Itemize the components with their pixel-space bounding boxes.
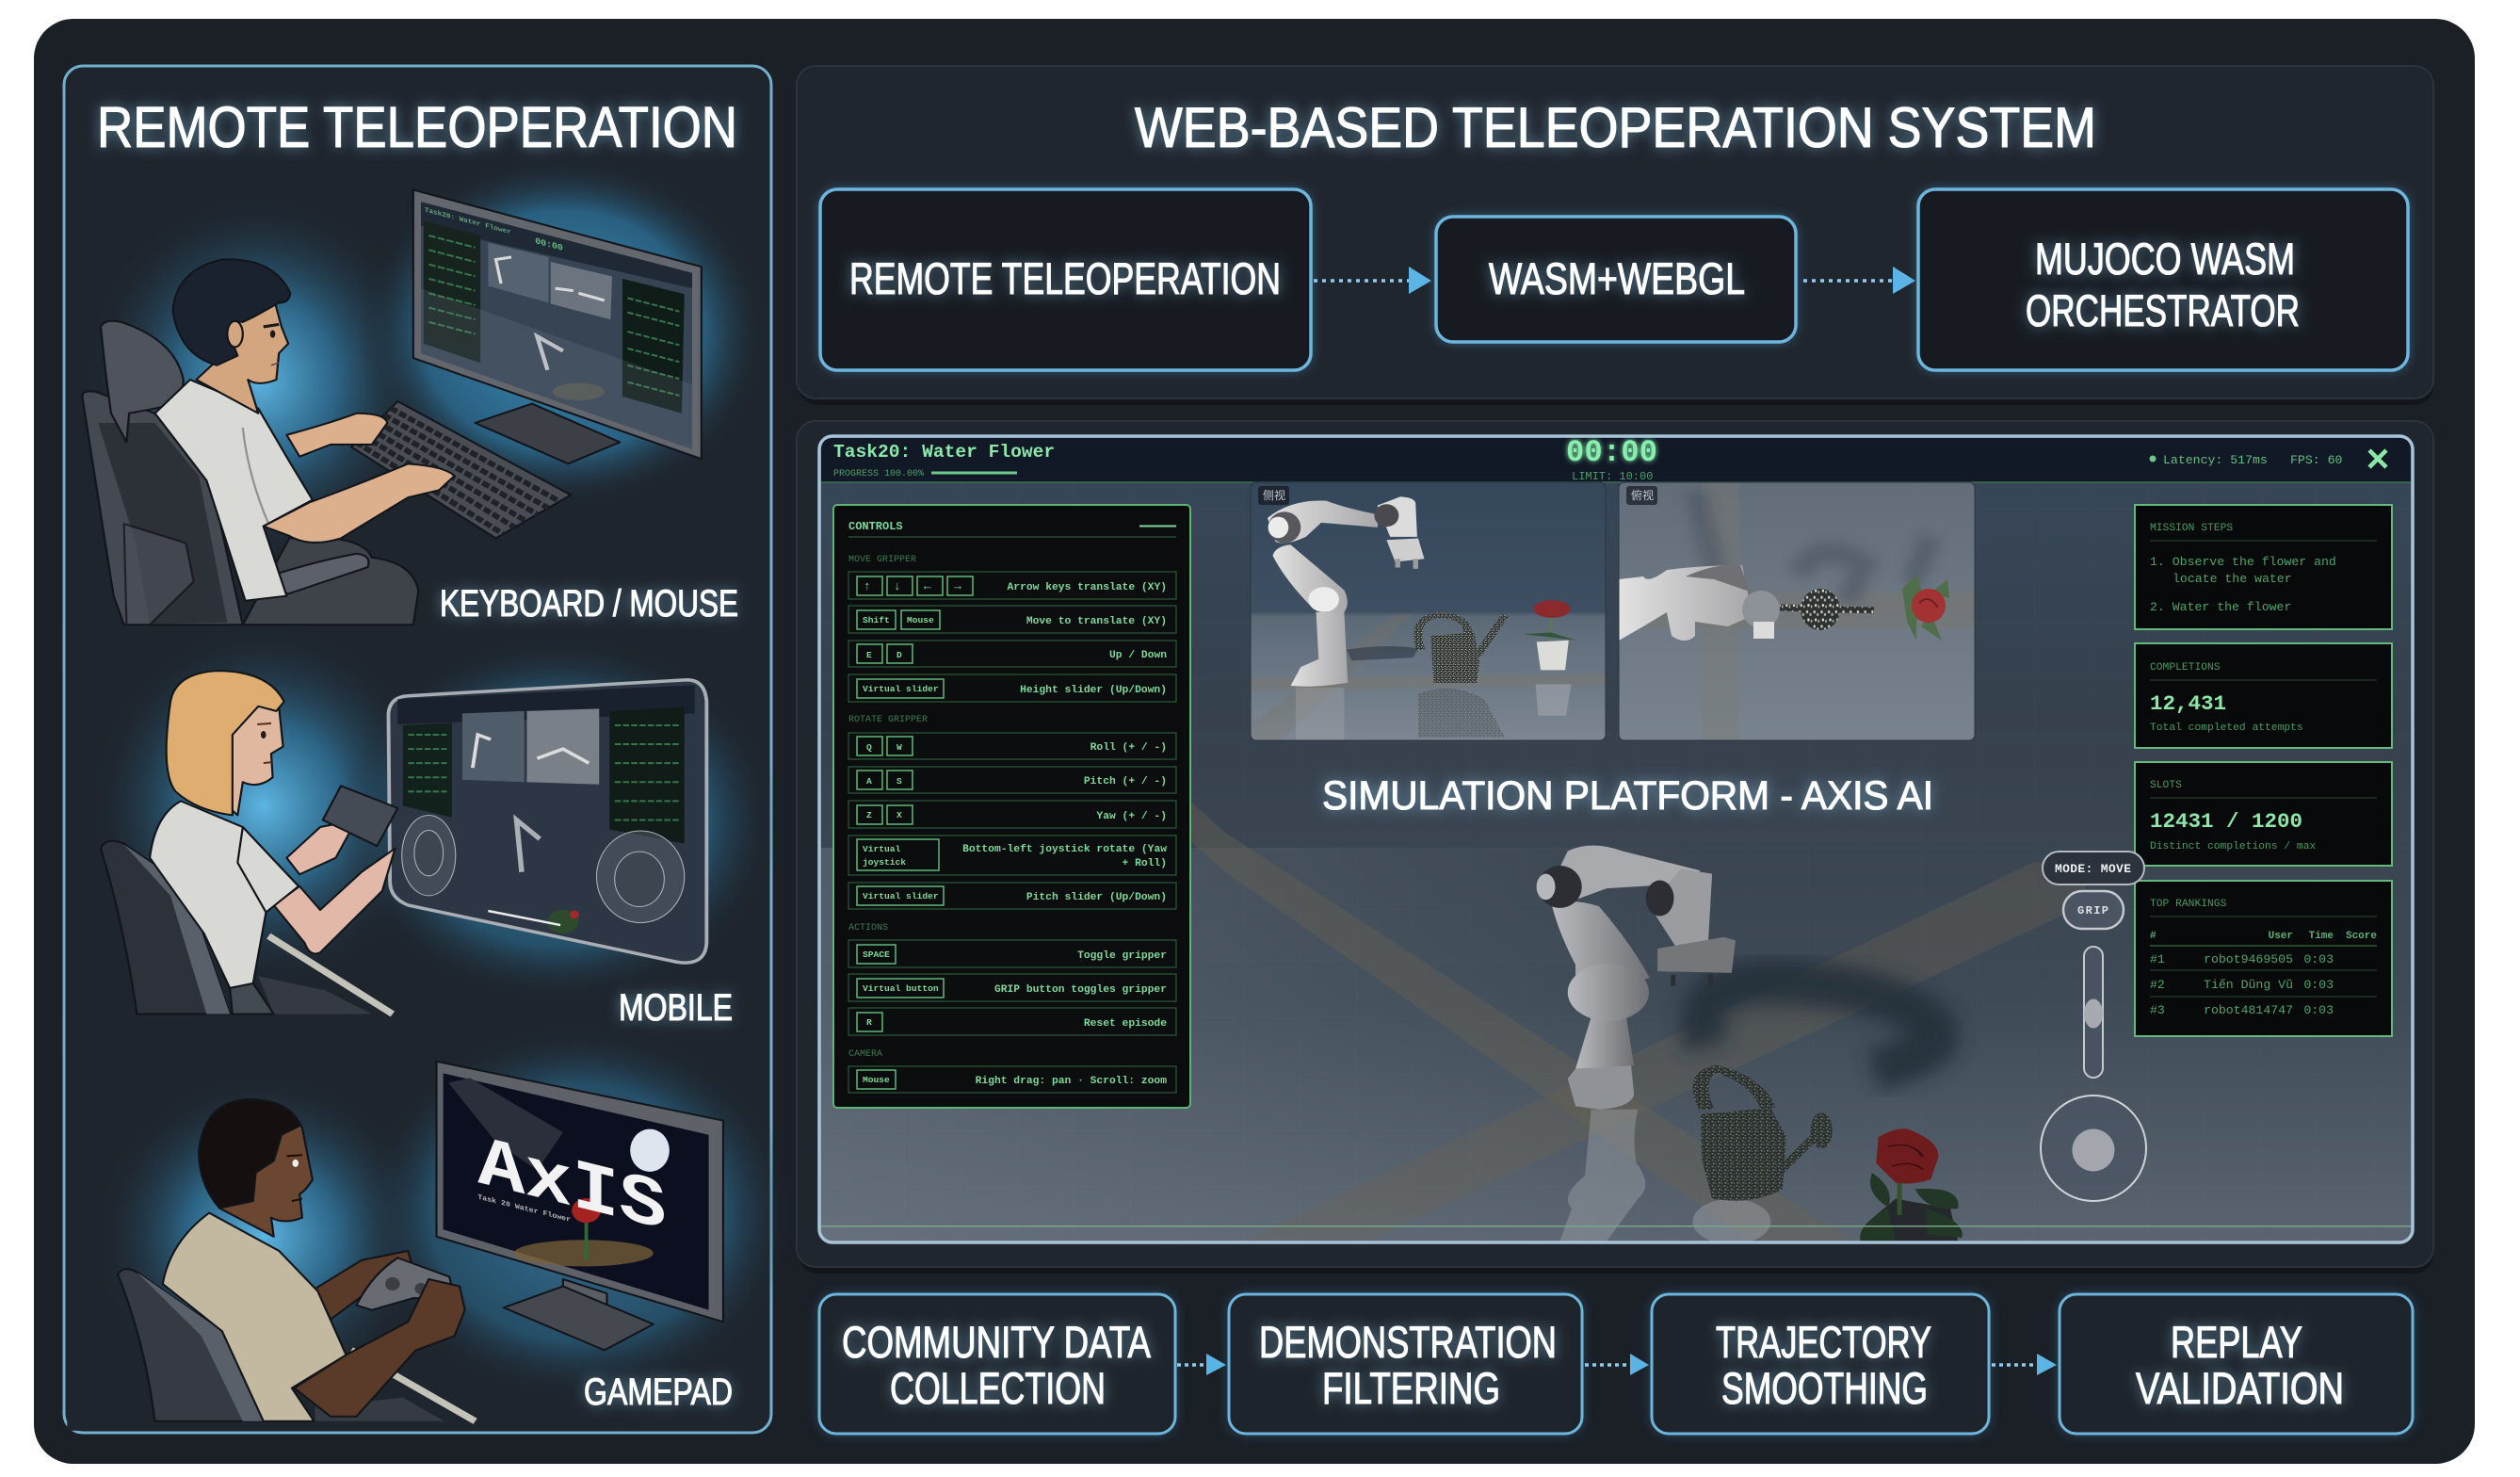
time limit: LIMIT: 10:00 xyxy=(1572,470,1653,483)
row: pitch slider xyxy=(848,883,1176,909)
panel: mission steps: 1. Observe the flower and xyxy=(2150,555,2336,569)
panel: top rankings: #2 xyxy=(2150,978,2165,992)
timer: 00:00 xyxy=(1566,435,1657,470)
row: joystick xyxy=(848,836,1176,875)
panel: completions xyxy=(2135,643,2392,748)
row: pitch slider: Pitch slider (Up/Down) xyxy=(1026,892,1167,903)
node: mujoco wasm orchestrator: MUJOCO WASM xyxy=(2035,234,2295,284)
row: up down xyxy=(848,641,1176,667)
panel: slots: 12431 / 1200 xyxy=(2150,809,2302,834)
panel: mission steps: 2. Water the flower xyxy=(2150,600,2291,614)
panel: controls: CONTROLS xyxy=(848,520,903,533)
pipeline: community data collection: COLLECTION xyxy=(890,1363,1106,1413)
panel: top rankings: 0:03 xyxy=(2303,952,2334,966)
panel: mission steps: MISSION STEPS xyxy=(2150,523,2233,534)
row: reset xyxy=(848,1008,1176,1035)
row: height slider: Virtual slider xyxy=(863,684,939,694)
task title: Task20: Water Flower xyxy=(833,442,1055,463)
row: shift mouse xyxy=(848,606,1176,633)
control: grip button: GRIP xyxy=(2077,904,2108,917)
illustration: mobile operator xyxy=(67,621,780,1057)
rose xyxy=(1860,1128,1963,1242)
tag: side view xyxy=(1258,486,1289,505)
panel: top rankings: robot4814747 xyxy=(2204,1003,2293,1017)
panel: controls xyxy=(833,505,1190,1108)
row: height slider: Height slider (Up/Down) xyxy=(1020,685,1167,696)
icon: keyboard xyxy=(351,401,571,538)
label: keyboard / mouse: KEYBOARD / MOUSE xyxy=(440,583,738,625)
control: vertical slider xyxy=(2084,947,2103,1078)
control: grip button xyxy=(2063,891,2124,929)
tag: top view: 俯视 xyxy=(1631,488,1654,502)
row: arrow keys: ← xyxy=(924,579,931,593)
panel: top rankings: #3 xyxy=(2150,1003,2165,1017)
pipeline: trajectory smoothing xyxy=(1652,1294,1989,1434)
status: Latency: 517ms xyxy=(2163,453,2268,467)
icon: gaming monitor: Task 20 Water Flower xyxy=(477,1193,571,1225)
control: mode pill: MODE: MOVE xyxy=(2055,862,2131,876)
node: wasm+webgl: WASM+WEBGL xyxy=(1489,253,1745,303)
row: yaw: Yaw (+ / -) xyxy=(1096,811,1167,822)
icon: office chair xyxy=(82,321,243,625)
panel: top rankings: 0:03 xyxy=(2303,1003,2334,1017)
panel: controls: MOVE GRIPPER xyxy=(848,555,916,565)
row: up down: E xyxy=(866,650,872,660)
arrow: remote teleoperation to wasm xyxy=(1314,267,1431,294)
row: reset: R xyxy=(866,1017,872,1028)
heading: remote teleoperation: REMOTE TELEOPERATION xyxy=(97,95,737,159)
heading: web-based teleoperation system: WEB-BASED TELEOPERATION SYSTEM xyxy=(1135,96,2096,159)
arrow: pipeline 1 xyxy=(1177,1354,1226,1375)
main robot arm xyxy=(1537,845,1736,1242)
row: camera: Mouse xyxy=(863,1075,890,1085)
panel: top rankings: Score xyxy=(2346,931,2377,942)
node: remote teleoperation xyxy=(820,189,1311,370)
icon: tablet screen xyxy=(388,680,706,963)
icon: gaming monitor xyxy=(436,1062,723,1350)
label: mobile: MOBILE xyxy=(619,987,733,1029)
bottom bar line xyxy=(819,1225,2413,1226)
illustration: gamepad operator xyxy=(67,1024,796,1431)
camera view: side xyxy=(1251,482,1606,740)
row: camera xyxy=(848,1066,1176,1093)
panel: top rankings: Tiến Dũng Vũ xyxy=(2204,978,2293,992)
row: arrow keys: ↓ xyxy=(894,579,901,593)
tag: side view: 侧视 xyxy=(1263,488,1285,502)
pipeline: demonstration filtering: DEMONSTRATION xyxy=(1259,1317,1557,1367)
row: pitch xyxy=(848,767,1176,793)
row: space xyxy=(848,940,1176,967)
row: yaw: Z xyxy=(866,810,872,820)
row: pitch: S xyxy=(897,776,902,787)
panel: mission steps: locate the water xyxy=(2173,572,2292,586)
row: arrow keys: Arrow keys translate (XY) xyxy=(1008,582,1167,593)
row: height slider xyxy=(848,674,1176,702)
pipeline: replay validation: REPLAY xyxy=(2171,1317,2302,1367)
row: joystick: Bottom-left joystick rotate (Yaw xyxy=(962,844,1167,855)
panel: top rankings: User xyxy=(2269,931,2293,942)
row: yaw: X xyxy=(897,810,902,820)
flower small xyxy=(1523,600,1576,670)
pipeline: demonstration filtering: FILTERING xyxy=(1322,1363,1500,1413)
panel: mission steps xyxy=(2135,505,2392,629)
panel: top rankings: robot9469505 xyxy=(2204,952,2293,966)
panel: top rankings: 0:03 xyxy=(2303,978,2334,992)
panel: top rankings: #1 xyxy=(2150,952,2165,966)
pipeline: demonstration filtering xyxy=(1229,1294,1582,1434)
row: camera: Right drag: pan · Scroll: zoom xyxy=(976,1076,1167,1087)
caption: simulation platform: SIMULATION PLATFORM - AXIS AI xyxy=(1322,773,1933,819)
panel: completions: COMPLETIONS xyxy=(2150,662,2221,674)
figure: seated mobile user xyxy=(101,671,397,1014)
tag: top view xyxy=(1626,486,1657,505)
arrow: pipeline 3 xyxy=(1992,1354,2057,1375)
status xyxy=(2149,453,2342,467)
row: shift mouse: Shift xyxy=(863,615,890,625)
row: grip button xyxy=(848,974,1176,1001)
pipeline: replay validation xyxy=(2060,1294,2413,1434)
row: roll: Roll (+ / -) xyxy=(1090,742,1167,754)
figure: seated operator xyxy=(155,259,455,625)
row: arrow keys: → xyxy=(954,579,961,593)
label: gamepad: GAMEPAD xyxy=(584,1372,733,1413)
icon: desktop monitor: Task20: Water Flower xyxy=(425,207,511,236)
pipeline: community data collection: COMMUNITY DATA xyxy=(842,1317,1152,1367)
arrow: wasm to mujoco xyxy=(1803,267,1915,294)
panel: simulation platform xyxy=(797,421,2433,1274)
panel: top rankings: # xyxy=(2150,931,2157,942)
row: up down: Up / Down xyxy=(1109,650,1167,661)
panel: completions: Total completed attempts xyxy=(2150,722,2303,734)
control: joystick xyxy=(2041,1096,2146,1201)
node: remote teleoperation: REMOTE TELEOPERATION xyxy=(849,253,1281,303)
simulator screen xyxy=(819,435,2413,1244)
row: up down: D xyxy=(897,650,902,660)
row: pitch: A xyxy=(866,776,872,787)
row: joystick: + Roll) xyxy=(1123,858,1167,869)
row: roll xyxy=(848,733,1176,759)
top bar xyxy=(821,435,2411,483)
row: pitch slider: Virtual slider xyxy=(863,891,939,901)
progress xyxy=(833,469,1017,479)
illustration: keyboard and mouse operator xyxy=(67,154,769,668)
figure: seated gamepad user xyxy=(118,1099,476,1421)
panel: completions: 12,431 xyxy=(2150,691,2226,716)
panel: controls: CAMERA xyxy=(848,1049,882,1060)
arrow: pipeline 2 xyxy=(1585,1354,1649,1375)
panel: slots: Distinct completions / max xyxy=(2150,841,2316,852)
node: mujoco wasm orchestrator: ORCHESTRATOR xyxy=(2026,285,2300,335)
screen title: AxIS xyxy=(477,1124,667,1251)
row: arrow keys: ↑ xyxy=(864,579,871,593)
row: space: SPACE xyxy=(863,950,890,960)
row: shift mouse: Mouse xyxy=(907,615,934,625)
row: pitch: Pitch (+ / -) xyxy=(1084,776,1167,787)
node: wasm+webgl xyxy=(1436,217,1796,342)
row: joystick: joystick xyxy=(863,857,906,868)
row: roll: W xyxy=(897,742,902,753)
status: FPS: 60 xyxy=(2290,453,2342,467)
pipeline: trajectory smoothing: TRAJECTORY xyxy=(1716,1317,1931,1367)
row: roll: Q xyxy=(866,742,872,753)
row: arrow keys xyxy=(848,572,1176,599)
pipeline: trajectory smoothing: SMOOTHING xyxy=(1721,1363,1928,1413)
pipeline: community data collection xyxy=(819,1294,1175,1434)
progress: PROGRESS 100.00% xyxy=(833,469,924,479)
panel: slots: SLOTS xyxy=(2150,780,2182,791)
icon: desktop monitor: 00:00 xyxy=(535,236,563,253)
panel: remote teleoperation xyxy=(64,66,796,1433)
panel: controls: ROTATE GRIPPER xyxy=(848,715,928,725)
row: yaw xyxy=(848,801,1176,828)
watering can xyxy=(1692,1069,1833,1244)
icon: close xyxy=(2369,450,2386,467)
watering can small xyxy=(1418,615,1505,683)
panel: top rankings xyxy=(2135,881,2392,1036)
camera view: top xyxy=(1619,482,1975,740)
pipeline: replay validation: VALIDATION xyxy=(2136,1363,2344,1413)
row: shift mouse: Move to translate (XY) xyxy=(1026,616,1167,627)
row: joystick: Virtual xyxy=(863,844,901,854)
panel: top rankings: Time xyxy=(2309,931,2334,942)
row: space: Toggle gripper xyxy=(1077,950,1167,962)
robot shadow xyxy=(1703,982,1938,1070)
icon: desktop monitor xyxy=(413,190,702,463)
row: reset: Reset episode xyxy=(1084,1018,1167,1030)
control: mode pill xyxy=(2043,852,2144,885)
node: mujoco wasm orchestrator xyxy=(1918,189,2408,370)
panel: web-based teleoperation system xyxy=(797,66,2433,405)
row: grip button: GRIP button toggles gripper xyxy=(994,984,1167,996)
panel: controls: ACTIONS xyxy=(848,923,888,933)
panel: slots xyxy=(2135,762,2392,866)
panel: top rankings: TOP RANKINGS xyxy=(2150,899,2227,910)
row: grip button: Virtual button xyxy=(863,983,939,994)
